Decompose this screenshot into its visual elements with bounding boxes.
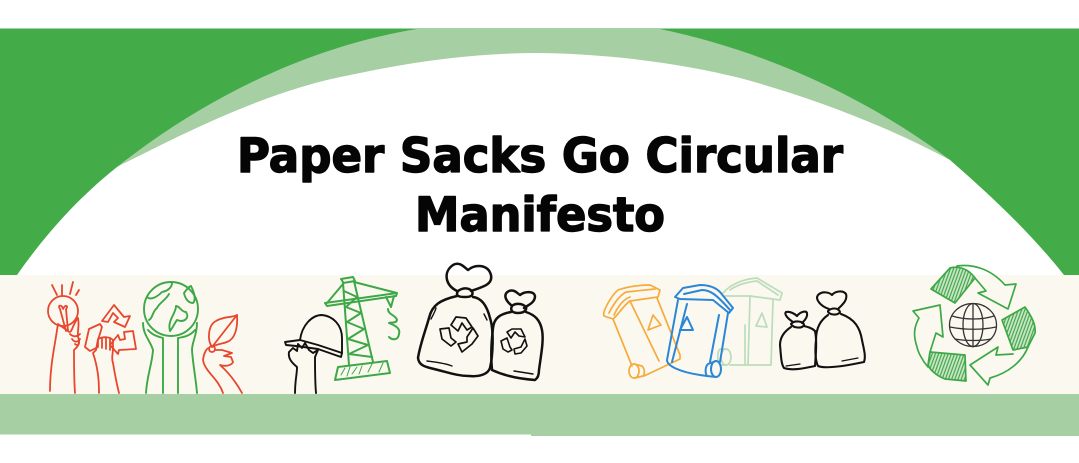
- icon: pale green wheelie bin: [718, 278, 782, 365]
- icon: hand holding recycling arrows: [85, 305, 136, 393]
- icon: orange wheelie bin: [604, 285, 680, 378]
- icon: hand holding leaf: [203, 315, 242, 393]
- recycling arrows: [913, 266, 1035, 385]
- icon: green crane: [325, 277, 399, 380]
- icon: hand holding light bulb: [48, 282, 80, 393]
- title: [237, 129, 844, 243]
- title line 1: Paper Sacks Go Circular: [237, 129, 844, 184]
- illustration strip background: [0, 275, 1079, 394]
- icon: hands holding green globe: [143, 282, 198, 393]
- globe: [950, 304, 996, 347]
- icon: small black bag: [780, 312, 816, 369]
- header: pale green arc: [117, 29, 950, 167]
- header: dark green background: [0, 28, 1079, 276]
- icon: large black sack: [418, 264, 493, 376]
- bottom pale green band: [0, 394, 1079, 436]
- icon: hand holding hard hat: [285, 315, 342, 393]
- icon: blue wheelie bin: [667, 285, 733, 377]
- icon: large black bag: [815, 291, 865, 367]
- header: white dome: [17, 53, 1064, 275]
- icon: small black sack: [491, 290, 543, 380]
- icon: recycling symbol with globe: [913, 266, 1035, 385]
- title line 2: Manifesto: [415, 188, 665, 243]
